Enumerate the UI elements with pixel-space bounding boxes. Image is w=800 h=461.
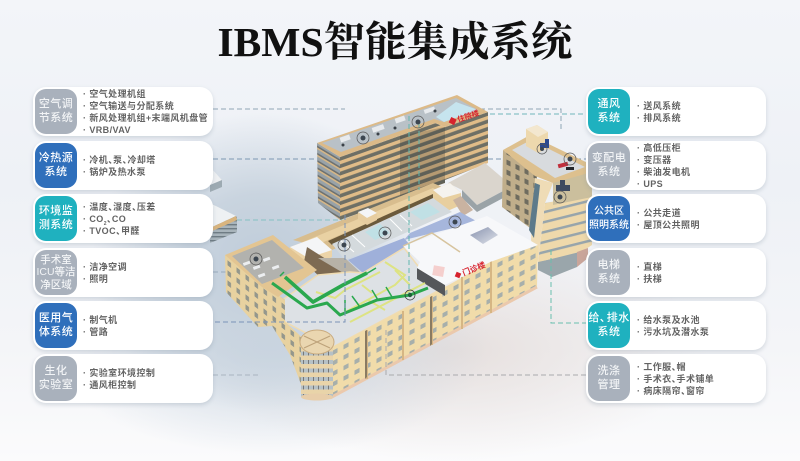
vertical dashed connectors in front xyxy=(213,116,586,375)
panel: 生化实验室 xyxy=(33,354,213,403)
list: · CO2、CO xyxy=(83,214,126,226)
long facade xyxy=(330,245,538,398)
list: · 锅炉及热水泵 xyxy=(83,166,146,176)
list xyxy=(637,100,681,122)
clinic canopy xyxy=(417,268,445,296)
panel: 变配电系统 xyxy=(586,141,766,190)
list: · 空气输送与分配系统 xyxy=(83,100,174,110)
panel: 电梯系统 xyxy=(586,248,766,297)
clinic sign xyxy=(453,260,487,281)
list: · 实验室环境控制 xyxy=(83,368,155,378)
list xyxy=(83,154,156,176)
lower podium block xyxy=(225,183,538,400)
dark courtyard xyxy=(304,247,348,279)
building fragments behind left cards xyxy=(210,167,237,243)
left wing walls xyxy=(225,255,305,395)
badge: 系统 xyxy=(598,272,620,284)
podium roof xyxy=(278,248,445,347)
panel: 环境监测系统 xyxy=(33,194,213,243)
badge xyxy=(35,196,77,241)
badge: 测系统 xyxy=(39,218,73,230)
list xyxy=(637,262,662,284)
badge: 照明系统 xyxy=(589,220,629,230)
list: · 管路 xyxy=(83,326,108,336)
list: · 温度、湿度、压差 xyxy=(83,202,156,212)
list: · 空气处理机组 xyxy=(83,88,146,98)
upper corridor xyxy=(293,183,461,250)
badge: 变配电 xyxy=(592,152,626,164)
list: · 工作服、帽 xyxy=(637,362,686,372)
panel: 公共区照明系统 xyxy=(586,194,766,243)
list xyxy=(83,202,156,236)
beige ground slab xyxy=(448,163,505,212)
badge xyxy=(588,303,630,348)
title: IBMS智能集成系统 xyxy=(217,19,573,65)
badge xyxy=(588,143,630,188)
list xyxy=(637,208,700,230)
badge: 电梯 xyxy=(598,259,620,271)
panel: 给、排水系统 xyxy=(586,301,766,350)
list: · 洁净空调 xyxy=(83,262,127,272)
tall inpatient building xyxy=(317,95,488,220)
list xyxy=(637,314,709,336)
badge: 洗涤 xyxy=(598,365,620,377)
panel: 空气调节系统 xyxy=(33,87,213,136)
badge: 冷热源 xyxy=(39,152,73,164)
list: · 直梯 xyxy=(637,262,662,272)
list: · 送风系统 xyxy=(637,100,681,110)
badge xyxy=(35,356,77,401)
badge: 体系统 xyxy=(39,326,73,338)
list: · 冷机、泵、冷却塔 xyxy=(83,154,156,164)
badge: 系统 xyxy=(598,326,620,338)
badge: 环境监 xyxy=(39,205,73,217)
badge: 节系统 xyxy=(39,112,73,124)
panel: 通风系统 xyxy=(586,87,766,136)
badge xyxy=(35,250,77,295)
badge xyxy=(588,89,630,134)
list: · 柴油发电机 xyxy=(637,166,690,176)
badge xyxy=(588,356,630,401)
badge: 医用气 xyxy=(39,312,73,324)
blue glass roof xyxy=(348,238,410,273)
badge xyxy=(35,303,77,348)
white boxes xyxy=(290,237,332,268)
list xyxy=(83,88,208,134)
badge: 系统 xyxy=(598,112,620,124)
list: · 高低压柜 xyxy=(637,142,681,152)
yellow pipes on roof xyxy=(316,262,425,322)
badge: 生化 xyxy=(45,365,67,377)
list: · 通风柜控制 xyxy=(83,380,136,390)
badge xyxy=(588,250,630,295)
pale roof cross xyxy=(432,265,445,277)
right building xyxy=(502,125,592,277)
list: · 排风系统 xyxy=(637,112,681,122)
red sign: 住院楼 xyxy=(456,107,481,124)
list: · 病床隔帘、窗帘 xyxy=(637,386,705,396)
list xyxy=(83,314,118,336)
badge: 空气调 xyxy=(39,98,73,110)
list xyxy=(637,362,714,396)
list: · 公共走道 xyxy=(637,208,681,218)
badge xyxy=(35,89,77,134)
list xyxy=(83,368,155,390)
plant room strip xyxy=(332,198,452,260)
list: · 变压器 xyxy=(637,154,672,164)
list: · 制气机 xyxy=(83,314,118,324)
badge: 管理 xyxy=(598,378,620,390)
target icons xyxy=(250,116,576,300)
badge: ICU等洁 xyxy=(36,266,76,278)
list xyxy=(637,142,690,188)
list: · 给水泵及水池 xyxy=(637,314,700,324)
left wing roof xyxy=(225,235,317,297)
list: · 扶梯 xyxy=(637,274,662,284)
panel: 医用气体系统 xyxy=(33,301,213,350)
badge: 系统 xyxy=(45,166,67,178)
list: · VRB/VAV xyxy=(83,124,131,134)
badge: 实验室 xyxy=(39,378,73,390)
badge: 净区域 xyxy=(40,279,72,291)
list xyxy=(83,262,127,284)
panel: 冷热源系统 xyxy=(33,141,213,190)
badge: 通风 xyxy=(598,98,620,110)
red sign xyxy=(447,107,481,127)
list: · TVOC、甲醛 xyxy=(83,226,140,236)
dashed connector lines behind building xyxy=(213,109,586,375)
badge: 公共区 xyxy=(594,206,624,217)
list: · 新风处理机组+末端风机盘管 xyxy=(83,112,208,122)
green pipes on roof xyxy=(272,268,428,315)
badge: 手术室 xyxy=(40,254,72,266)
skylight xyxy=(470,227,498,244)
clinic sign: 门诊楼 xyxy=(461,260,487,278)
list: · UPS xyxy=(637,178,663,188)
list: · 污水坑及潜水泵 xyxy=(637,326,709,336)
panel: 洗涤管理 xyxy=(586,354,766,403)
badge xyxy=(35,143,77,188)
list: · 屋顶公共照明 xyxy=(637,220,700,230)
list: · 照明 xyxy=(83,274,108,284)
badge: 系统 xyxy=(598,166,620,178)
list: · 手术衣、手术铺单 xyxy=(637,374,714,384)
badge: 给、排水 xyxy=(588,312,630,324)
panel: 手术室ICU等洁净区域 xyxy=(33,248,213,297)
round tower xyxy=(301,342,333,397)
badge xyxy=(588,196,630,241)
